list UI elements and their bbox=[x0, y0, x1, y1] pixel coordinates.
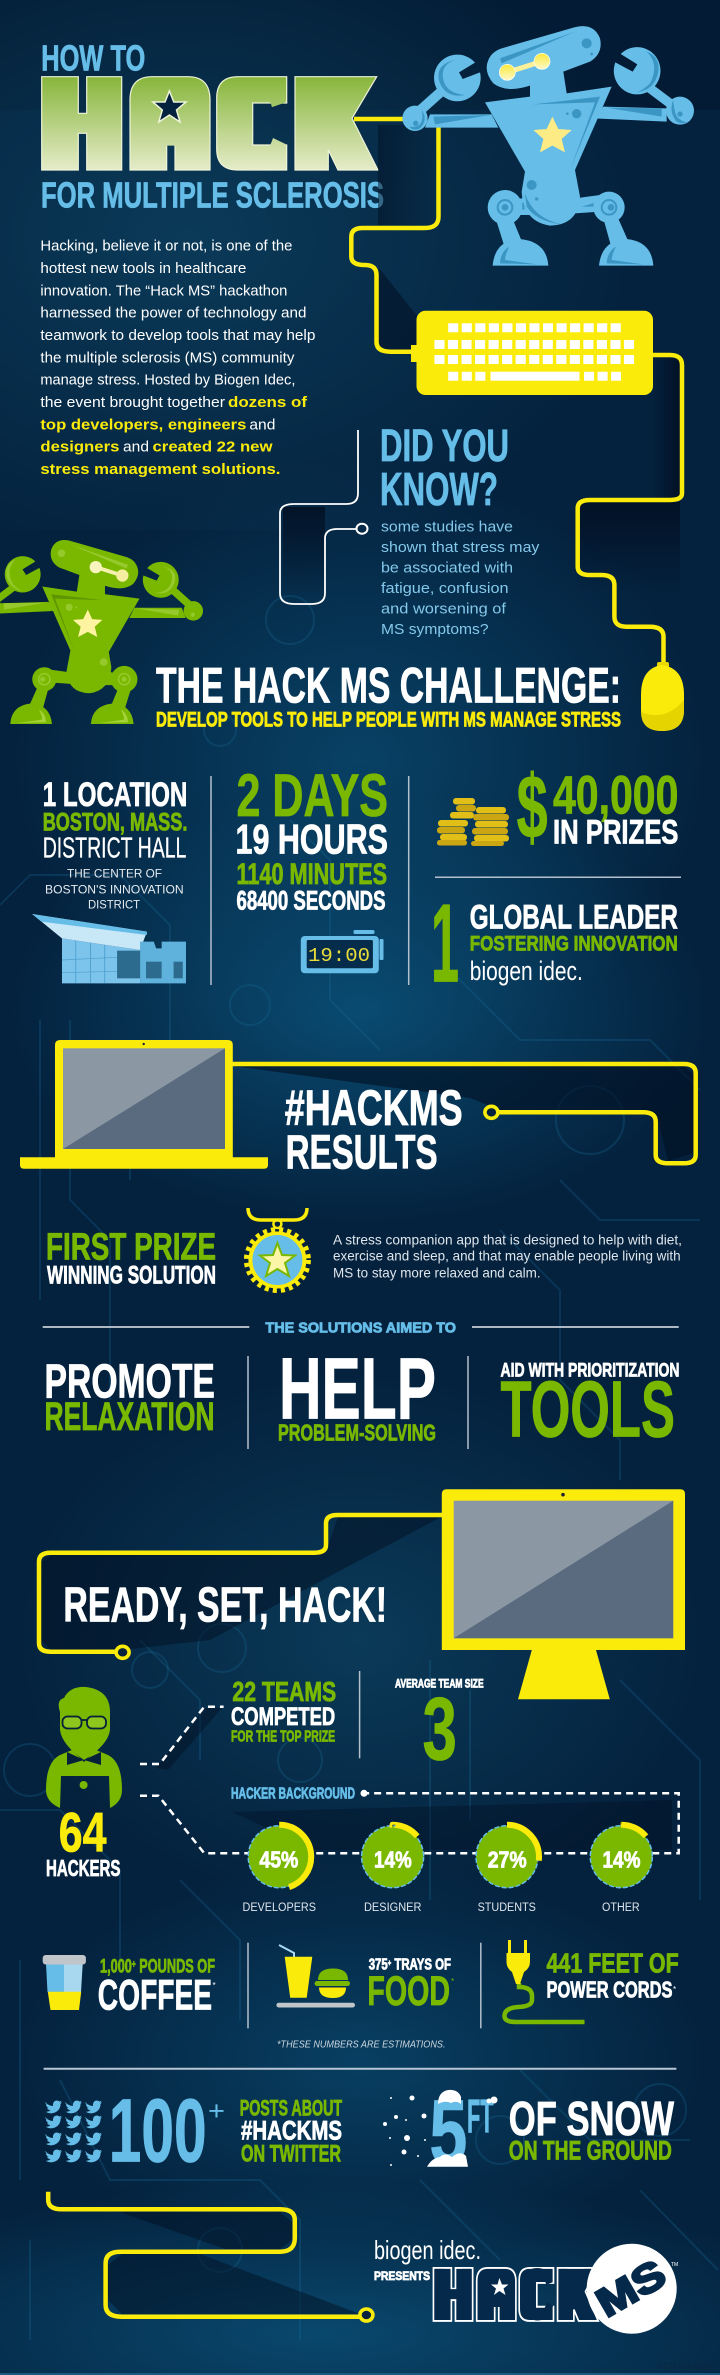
wire: robot to keyboard bbox=[351, 125, 438, 352]
icon: star bbox=[533, 117, 572, 152]
panel: global leader bbox=[431, 882, 678, 1006]
chart: developers 45%: 45% bbox=[259, 1847, 298, 1873]
body text: introduction: hottest new tools in healthcare bbox=[40, 260, 246, 277]
text: did you know body: and worsening of bbox=[381, 601, 507, 618]
panel: location: THE CENTER OF bbox=[67, 867, 162, 881]
panel: the solutions aimed to: THE SOLUTIONS AIMED TO bbox=[265, 1321, 456, 1337]
icon: dashed line dot bbox=[360, 1790, 368, 1797]
panel: power cords: * bbox=[673, 1985, 676, 1994]
chart: designer 14%: DESIGNER bbox=[364, 1902, 421, 1914]
text: did you know body bbox=[381, 519, 540, 638]
panel: food bbox=[248, 1943, 454, 2028]
icon: star bbox=[73, 610, 102, 637]
panel: twitter posts bbox=[45, 2081, 343, 2181]
heading: #hackms results: #HACKMS bbox=[285, 1080, 463, 1136]
text: did you know body: some studies have bbox=[381, 519, 513, 536]
text: winning solution description: exercise and sleep, and that may enable people living with bbox=[333, 1248, 681, 1264]
logo word: hack: C bbox=[518, 2254, 555, 2336]
icon: building bbox=[32, 914, 186, 983]
robot: blue bbox=[402, 26, 694, 266]
text: winning solution description: MS to stay more relaxed and calm. bbox=[333, 1264, 541, 1280]
icon: logo star bbox=[491, 2278, 508, 2295]
title: how to hack for multiple sclerosis bbox=[37, 38, 384, 215]
chart: students 27%: 27% bbox=[488, 1847, 527, 1873]
panel: coffee bbox=[43, 1955, 216, 2019]
chart: developers 45% bbox=[242, 1825, 316, 1914]
icon: bone eye bbox=[90, 561, 129, 582]
text: did you know body: shown that stress may bbox=[381, 539, 540, 556]
logo word: hack: K bbox=[555, 2254, 597, 2336]
chart: other 14% bbox=[589, 1825, 653, 1914]
panel: the solutions aimed to: HELP bbox=[279, 1340, 436, 1437]
panel: location: BOSTON, MASS. bbox=[43, 809, 187, 837]
panel: teams: 22 TEAMS bbox=[232, 1676, 336, 1707]
title word: hack: C bbox=[214, 50, 289, 196]
panel: prizes: IN PRIZES bbox=[553, 813, 678, 851]
panel: teams bbox=[231, 1671, 484, 1778]
icon: hacker figure bbox=[46, 1687, 122, 1808]
body text: introduction: top developers, engineers bbox=[40, 416, 246, 433]
panel: coffee: + bbox=[132, 1960, 136, 1971]
logo: biogen idec presents hack ms bbox=[374, 2235, 678, 2336]
title word: hack: H bbox=[37, 50, 126, 196]
panel: did you know: KNOW? bbox=[380, 463, 498, 515]
heading: the hack ms challenge bbox=[156, 658, 621, 732]
wire: monitor bbox=[39, 1515, 443, 1652]
panel: duration: 2 DAYS bbox=[236, 762, 388, 829]
panel: power cords bbox=[481, 1940, 679, 2028]
robot: green bbox=[0, 540, 203, 724]
text: did you know body: MS symptoms? bbox=[381, 621, 488, 638]
panel: the solutions aimed to: PROBLEM-SOLVING bbox=[278, 1420, 436, 1446]
title word: hack bbox=[37, 50, 378, 196]
icon: medal bbox=[247, 1208, 308, 1290]
icon: twitter birds bbox=[45, 2100, 102, 2162]
icon: wire end circle bbox=[356, 524, 368, 534]
body text: introduction: stress management solutions. bbox=[40, 461, 280, 478]
logo word: hack bbox=[431, 2254, 598, 2336]
panel: twitter posts: 100 bbox=[109, 2081, 207, 2181]
footnote: *THESE NUMBERS ARE ESTIMATIONS. bbox=[277, 2039, 446, 2051]
panel: hacker background: HACKER BACKGROUND bbox=[231, 1785, 355, 1802]
wire: keyboard to mouse bbox=[578, 355, 682, 665]
panel: teams: 3 bbox=[422, 1678, 457, 1778]
panel: snow: 5 bbox=[429, 2081, 467, 2183]
text: did you know body: be associated with bbox=[381, 560, 513, 577]
icon: snow caps and flakes bbox=[383, 2090, 498, 2167]
panel: location: DISTRICT bbox=[88, 897, 141, 911]
logo word: hack: H bbox=[431, 2254, 475, 2336]
panel: did you know bbox=[380, 420, 540, 638]
panel: twitter posts: POSTS ABOUT bbox=[240, 2096, 343, 2121]
chart: students 27%: STUDENTS bbox=[478, 1902, 536, 1914]
chart: other 14%: 14% bbox=[602, 1847, 640, 1873]
text: winning solution description: A stress companion app that is designed to help with diet, bbox=[333, 1231, 682, 1247]
body text: introduction: teamwork to develop tools that may help bbox=[40, 327, 315, 344]
divider lines bbox=[211, 776, 681, 985]
panel: location: BOSTON'S INNOVATION bbox=[45, 882, 184, 896]
panel: prizes: $ bbox=[517, 758, 548, 858]
panel: location bbox=[32, 776, 187, 983]
wire: hack to robot bbox=[354, 117, 410, 121]
icon: wire end circle bbox=[485, 1106, 498, 1118]
panel: teams: AVERAGE TEAM SIZE bbox=[395, 1677, 484, 1691]
chart: students 27% bbox=[475, 1825, 539, 1914]
icon: gold coins bbox=[437, 798, 509, 846]
panel: did you know: DID YOU bbox=[380, 420, 509, 471]
stat: 64 hackers: 64 bbox=[59, 1801, 106, 1864]
footer code: FCH-US-0345 bbox=[658, 2361, 714, 2371]
dashed line: to hacker background bbox=[140, 1793, 679, 1853]
chart: developers 45%: DEVELOPERS bbox=[242, 1902, 316, 1914]
panel: the solutions aimed to: PROMOTE bbox=[44, 1354, 215, 1408]
body text: introduction: and bbox=[249, 416, 275, 433]
panel: teams: COMPETED bbox=[231, 1703, 335, 1731]
panel: food: * bbox=[451, 1977, 454, 1986]
panel: snow: FT bbox=[467, 2089, 494, 2142]
wire: did you know bbox=[280, 430, 358, 604]
logo: biogen idec presents hack ms: PRESENTS bbox=[374, 2269, 430, 2283]
panel: food: + bbox=[388, 1958, 391, 1967]
panel: coffee: COFFEE bbox=[98, 1971, 212, 2019]
panel: food: TRAYS OF bbox=[391, 1956, 451, 1973]
stat: 64 hackers: HACKERS bbox=[46, 1855, 120, 1881]
text: did you know body: fatigue, confusion bbox=[381, 580, 509, 597]
heading: #hackms results: RESULTS bbox=[286, 1125, 438, 1179]
dashed line: to teams bbox=[140, 1707, 224, 1764]
panel: hacker background bbox=[231, 1785, 653, 1914]
panel: twitter posts: #HACKMS bbox=[241, 2115, 342, 2145]
body text: introduction: designers bbox=[40, 439, 119, 456]
wire: laptop bbox=[232, 1064, 696, 1163]
panel: duration: 19 HOURS bbox=[236, 815, 388, 862]
panel: duration: 68400 SECONDS bbox=[236, 885, 386, 915]
panel: food: FOOD bbox=[367, 1967, 450, 2014]
logo: biogen idec presents hack ms: MS bbox=[589, 2252, 673, 2326]
panel: snow bbox=[383, 2081, 674, 2183]
panel: coffee: 1,000 bbox=[100, 1956, 149, 1978]
panel: teams: FOR THE TOP PRIZE bbox=[231, 1729, 335, 1746]
panel: prizes: 40,000 bbox=[553, 765, 678, 825]
panel: power cords: POWER CORDS bbox=[546, 1977, 672, 2003]
title: how to hack for multiple sclerosis: HOW TO bbox=[41, 38, 145, 79]
panel: duration: 1140 MINUTES bbox=[236, 858, 387, 891]
text: winning solution description bbox=[333, 1231, 682, 1280]
panel: first prize bbox=[46, 1208, 682, 1290]
panel: location: 1 LOCATION bbox=[43, 776, 187, 814]
panel: twitter posts: + bbox=[208, 2096, 225, 2126]
body text: introduction: and bbox=[123, 439, 149, 456]
heading: #hackms results bbox=[285, 1080, 463, 1179]
heading: ready, set, hack: READY, SET, HACK! bbox=[63, 1578, 387, 1633]
icon: wire end circle bbox=[360, 2309, 373, 2321]
icon: desktop monitor bbox=[442, 1489, 685, 1699]
chart: designer 14%: 14% bbox=[374, 1847, 412, 1873]
panel: twitter posts: ON TWITTER bbox=[241, 2141, 341, 2168]
body text: introduction: dozens of bbox=[228, 394, 308, 411]
body text: introduction: harnessed the power of technology and bbox=[40, 305, 306, 322]
icon: digital timer bbox=[301, 930, 384, 973]
title: how to hack for multiple sclerosis: FOR MULTIPLE SCLEROSIS bbox=[41, 174, 384, 215]
wire: closing bbox=[48, 2192, 360, 2317]
panel: location: DISTRICT HALL bbox=[43, 833, 186, 865]
body text: introduction: Hacking, believe it or not, is one of the bbox=[40, 238, 292, 255]
panel: first prize: FIRST PRIZE bbox=[46, 1226, 216, 1268]
body text: introduction bbox=[40, 238, 315, 478]
panel: the solutions aimed to bbox=[43, 1321, 679, 1454]
body text: introduction: the event brought together bbox=[40, 394, 225, 411]
icon: laptop bbox=[20, 1040, 268, 1169]
panel: coffee: POUNDS OF bbox=[136, 1956, 215, 1978]
title word: hack: K bbox=[289, 50, 374, 196]
panel: food: 375 bbox=[369, 1956, 395, 1973]
chart: other 14%: OTHER bbox=[602, 1902, 640, 1914]
panel: duration bbox=[236, 762, 388, 973]
logo: biogen idec presents hack ms: biogen idec. bbox=[374, 2235, 481, 2265]
icon: wire end circle bbox=[116, 1646, 129, 1658]
body text: introduction: manage stress. Hosted by Biogen Idec, bbox=[40, 372, 295, 389]
panel: global leader: biogen idec. bbox=[470, 956, 583, 986]
body text: introduction: created 22 new bbox=[152, 439, 273, 456]
logo: biogen idec presents hack ms: TM bbox=[671, 2262, 678, 2268]
panel: global leader: 1 bbox=[431, 882, 459, 1006]
panel: the solutions aimed to: RELAXATION bbox=[44, 1395, 214, 1439]
icon: plug and cord bbox=[504, 1940, 584, 2022]
panel: power cords: 441 FEET OF bbox=[546, 1948, 679, 1979]
icon: digital timer: 19:00 bbox=[308, 945, 370, 967]
logo word: hack: A bbox=[477, 2254, 516, 2336]
title word: hack: A bbox=[131, 50, 209, 196]
stat: 64 hackers bbox=[46, 1801, 120, 1881]
chart: designer 14% bbox=[361, 1825, 425, 1914]
icon: bone eye bbox=[499, 53, 550, 80]
panel: coffee: * bbox=[212, 1981, 216, 1990]
icon: mouse bbox=[641, 662, 684, 731]
icon: coffee cup bbox=[43, 1955, 86, 2010]
icon: drink, burger and tray bbox=[276, 1945, 355, 2008]
icon: keyboard bbox=[411, 311, 653, 395]
panel: first prize: WINNING SOLUTION bbox=[47, 1261, 216, 1289]
icon: star in the A of HACK bbox=[153, 91, 186, 122]
panel: prizes bbox=[437, 758, 678, 858]
body text: introduction: innovation. The “Hack MS” hackathon bbox=[40, 282, 287, 299]
body text: introduction: the multiple sclerosis (MS) community bbox=[40, 349, 295, 366]
